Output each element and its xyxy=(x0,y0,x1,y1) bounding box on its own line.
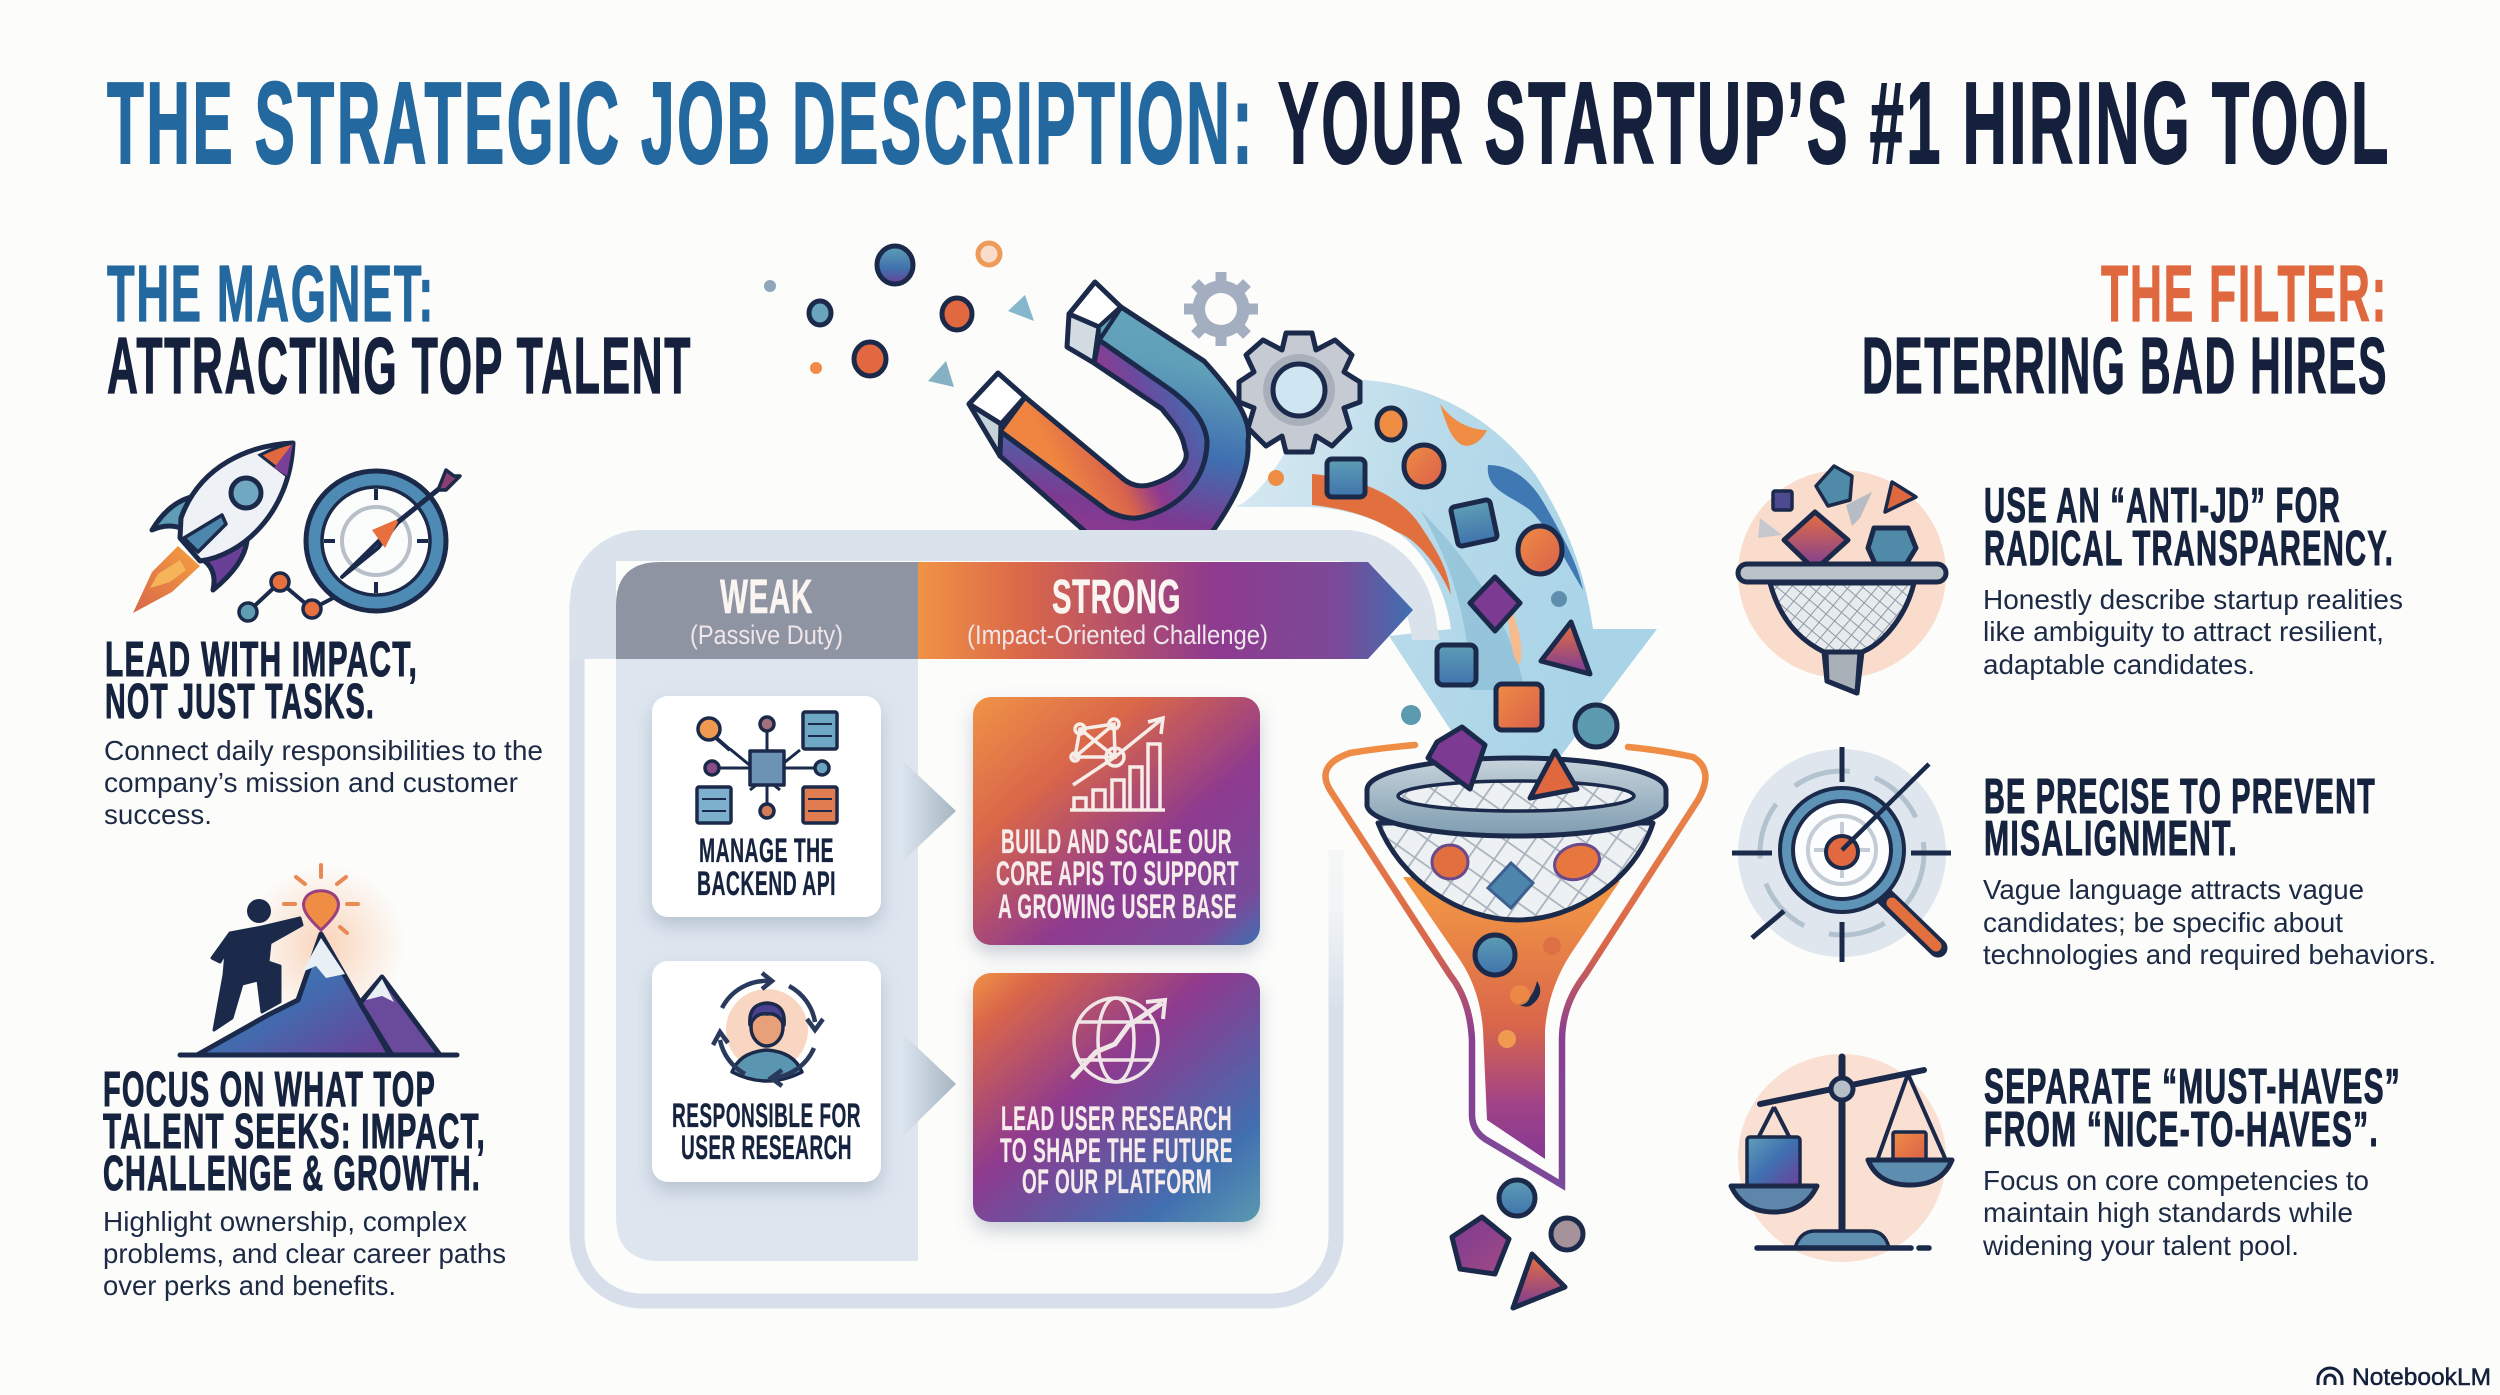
card: manage the backend api: BACKEND API xyxy=(697,865,836,903)
card: lead user research: LEAD USER RESEARCH xyxy=(1001,1100,1232,1138)
icon: api network xyxy=(697,712,837,823)
text block: lead with impact: LEAD WITH IMPACT, xyxy=(105,633,418,687)
text block: be precise xyxy=(1983,770,2436,970)
icon: funnel and sieve xyxy=(1326,727,1705,1185)
icon: person with cycle arrows xyxy=(713,973,823,1086)
card: build and scale: A GROWING USER BASE xyxy=(998,888,1237,926)
NotebookLM watermark: NotebookLM xyxy=(2352,1364,2491,1391)
icon: magnet xyxy=(969,282,1249,535)
arrow: first row xyxy=(902,760,956,862)
text block: must-haves: widening your talent pool. xyxy=(1982,1230,2299,1261)
card: manage the backend api xyxy=(652,696,881,917)
text block: focus on what top talent seeks: Highlight ownership, complex xyxy=(103,1206,467,1237)
icon: large gear xyxy=(1239,333,1360,452)
text block: must-haves: Focus on core competencies to xyxy=(1983,1165,2369,1196)
icon: globe with arrow xyxy=(1072,998,1165,1082)
card: build and scale xyxy=(973,697,1260,945)
text block: be precise: candidates; be specific about xyxy=(1983,907,2343,938)
heading: the magnet xyxy=(107,249,692,410)
icon: grey gear xyxy=(1184,272,1258,346)
text block: lead with impact: company’s mission and customer xyxy=(104,767,518,798)
card: manage the backend api: MANAGE THE xyxy=(699,832,834,870)
card: build and scale: BUILD AND SCALE OUR xyxy=(1001,823,1232,861)
text block: anti-jd: adaptable candidates. xyxy=(1983,649,2255,680)
text block: lead with impact xyxy=(104,633,543,830)
text block: focus on what top talent seeks: FOCUS ON WHAT TOP xyxy=(103,1063,436,1117)
icon: anti-jd filter xyxy=(1738,466,1946,693)
card: responsible for user research: RESPONSIBLE FOR xyxy=(672,1097,861,1135)
header: strong: (Impact-Oriented Challenge) xyxy=(967,620,1268,650)
card: lead user research: OF OUR PLATFORM xyxy=(1022,1163,1212,1201)
heading: the magnet: ATTRACTING TOP TALENT xyxy=(107,321,692,410)
card: responsible for user research xyxy=(652,961,881,1182)
icon: balance scale xyxy=(1731,1054,1952,1262)
filtered shapes below funnel xyxy=(1452,1180,1583,1308)
icon: rocket and compass xyxy=(133,443,460,621)
header: weak: WEAK xyxy=(720,571,813,624)
heading: the filter xyxy=(1862,249,2388,410)
column: weak background xyxy=(616,659,918,1261)
icon: growth chart and network xyxy=(1070,718,1165,810)
card: lead user research: TO SHAPE THE FUTURE xyxy=(1000,1132,1233,1170)
arrow: second row xyxy=(902,1033,956,1137)
panel: weak vs strong comparison xyxy=(570,530,1440,1301)
header: weak: (Passive Duty) xyxy=(690,620,843,650)
text block: must-haves xyxy=(1982,1060,2401,1261)
text block: be precise: technologies and required behaviors. xyxy=(1983,939,2436,970)
text block: be precise: MISALIGNMENT. xyxy=(1984,812,2238,866)
text block: lead with impact: success. xyxy=(104,799,212,830)
text block: focus on what top talent seeks: over perks and benefits. xyxy=(103,1270,396,1301)
text block: must-haves: maintain high standards while xyxy=(1983,1197,2353,1228)
text block: anti-jd xyxy=(1983,479,2403,680)
header: strong: STRONG xyxy=(1052,571,1181,624)
heading: the magnet: THE MAGNET: xyxy=(107,249,435,338)
header: weak xyxy=(616,562,918,659)
title: THE STRATEGIC JOB DESCRIPTION: xyxy=(107,58,1255,188)
text block: lead with impact: Connect daily responsibilities to the xyxy=(104,735,543,766)
text block: lead with impact: NOT JUST TASKS. xyxy=(105,675,375,729)
particles xyxy=(764,243,1034,387)
card: build and scale: CORE APIS TO SUPPORT xyxy=(996,855,1239,893)
text block: focus on what top talent seeks: TALENT SEEKS: IMPACT, xyxy=(103,1105,486,1159)
text block: be precise: Vague language attracts vague xyxy=(1983,874,2364,905)
text block: anti-jd: like ambiguity to attract resilient, xyxy=(1983,616,2384,647)
text block: focus on what top talent seeks xyxy=(103,1063,506,1301)
icon: precision magnifier target xyxy=(1732,747,1951,962)
icon: climber on mountain xyxy=(180,865,457,1055)
text block: anti-jd: Honestly describe startup realities xyxy=(1983,584,2403,615)
text block: focus on what top talent seeks: CHALLENGE & GROWTH. xyxy=(103,1147,481,1201)
arrow: talent stream into funnel xyxy=(1236,379,1657,790)
card: responsible for user research: USER RESEARCH xyxy=(681,1129,852,1167)
text block: focus on what top talent seeks: problems, and clear career paths xyxy=(103,1238,506,1269)
card: lead user research xyxy=(973,973,1260,1222)
header: strong xyxy=(918,562,1413,659)
